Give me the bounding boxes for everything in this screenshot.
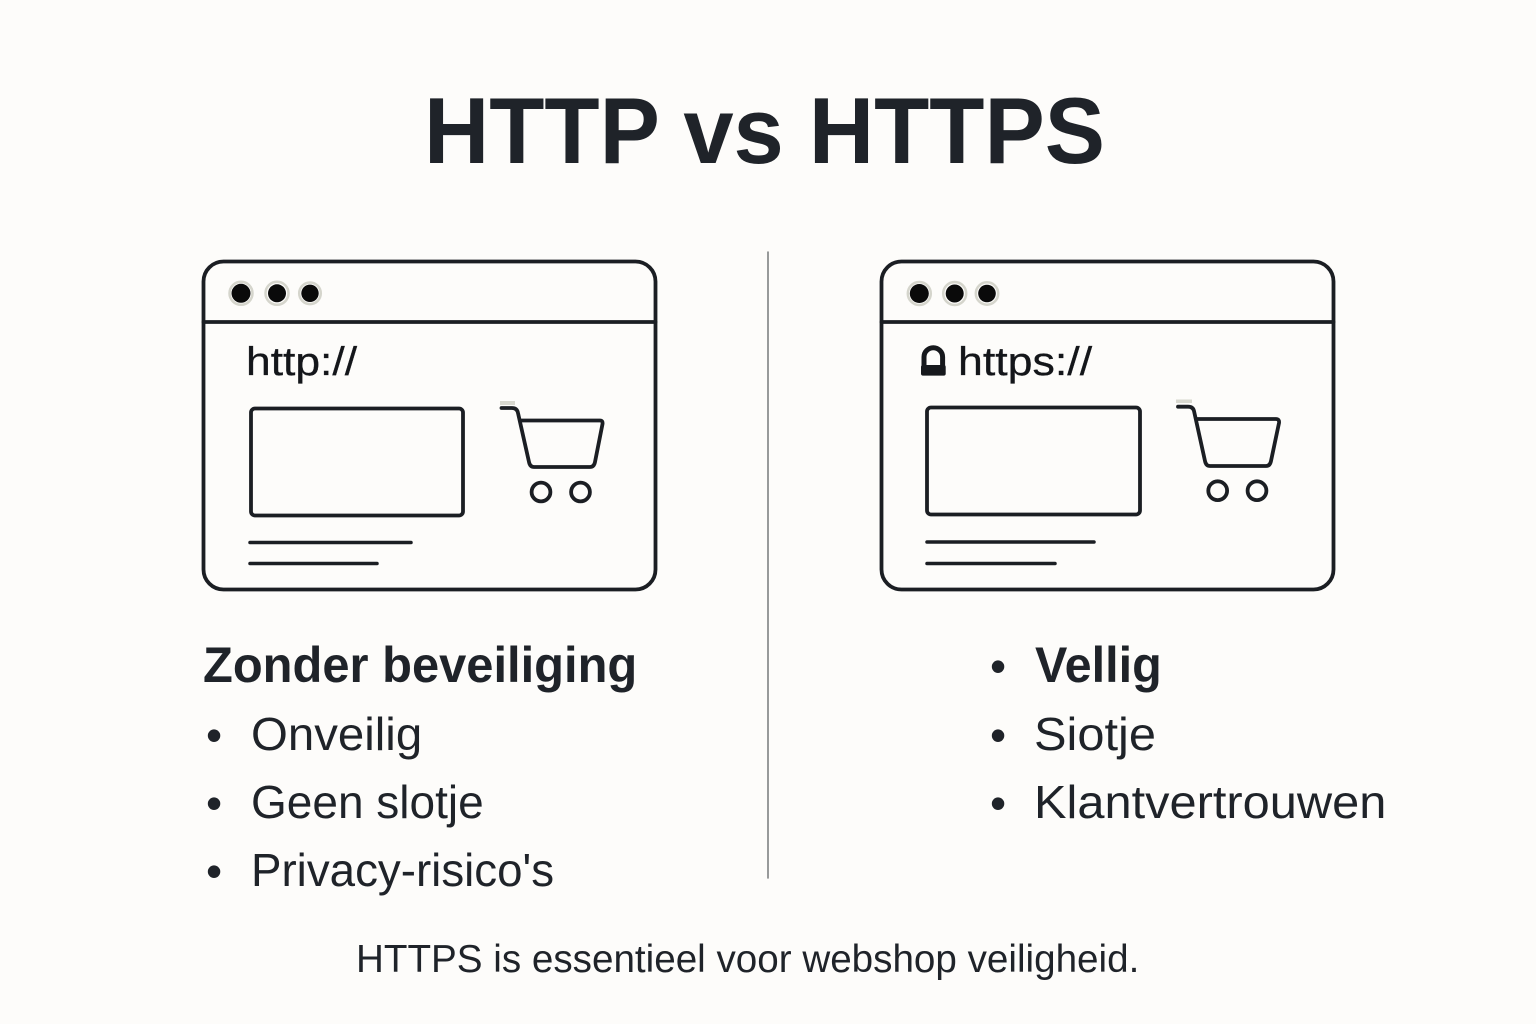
item: privacy risks: • bbox=[206, 845, 222, 897]
window frame bbox=[882, 262, 1334, 590]
icon: padlock bbox=[921, 348, 946, 376]
item: no lock: • bbox=[206, 777, 222, 829]
text placeholder lines bbox=[250, 542, 411, 564]
item: lock: Siotje bbox=[1034, 708, 1156, 760]
url label: https: https:// bbox=[958, 340, 1092, 384]
title bar divider bbox=[882, 320, 1334, 324]
item: customer trust: Klantvertrouwen bbox=[1034, 776, 1386, 828]
browser window: https bbox=[882, 262, 1334, 590]
item: no lock: Geen slotje bbox=[251, 776, 484, 828]
list: https benefits bbox=[990, 637, 1386, 829]
item: unsafe: Onveilig bbox=[251, 708, 422, 760]
content image placeholder bbox=[251, 408, 463, 516]
browser window: http bbox=[204, 262, 656, 590]
icon: shopping cart bbox=[1176, 400, 1279, 500]
heading: without security: Zonder beveiliging bbox=[203, 637, 637, 693]
item: safe: • bbox=[990, 640, 1006, 692]
title: HTTP vs HTTPS bbox=[424, 78, 1105, 183]
footer statement: HTTPS is essentieel voor webshop veiligheid. bbox=[356, 938, 1139, 981]
window frame bbox=[204, 262, 656, 590]
title bar divider bbox=[204, 320, 656, 324]
content image placeholder bbox=[927, 408, 1140, 514]
list: http drawbacks bbox=[206, 708, 554, 897]
item: customer trust: • bbox=[990, 777, 1006, 829]
item: privacy risks: Privacy-risico's bbox=[251, 844, 554, 896]
url label: http: http:// bbox=[246, 340, 357, 384]
item: safe: Vellig bbox=[1035, 637, 1162, 693]
item: lock: • bbox=[990, 709, 1006, 761]
window dots bbox=[230, 282, 321, 305]
divider line bbox=[767, 252, 769, 878]
text placeholder lines bbox=[927, 542, 1094, 564]
item: unsafe: • bbox=[206, 709, 222, 761]
icon: shopping cart bbox=[500, 401, 603, 501]
window dots bbox=[908, 282, 998, 305]
